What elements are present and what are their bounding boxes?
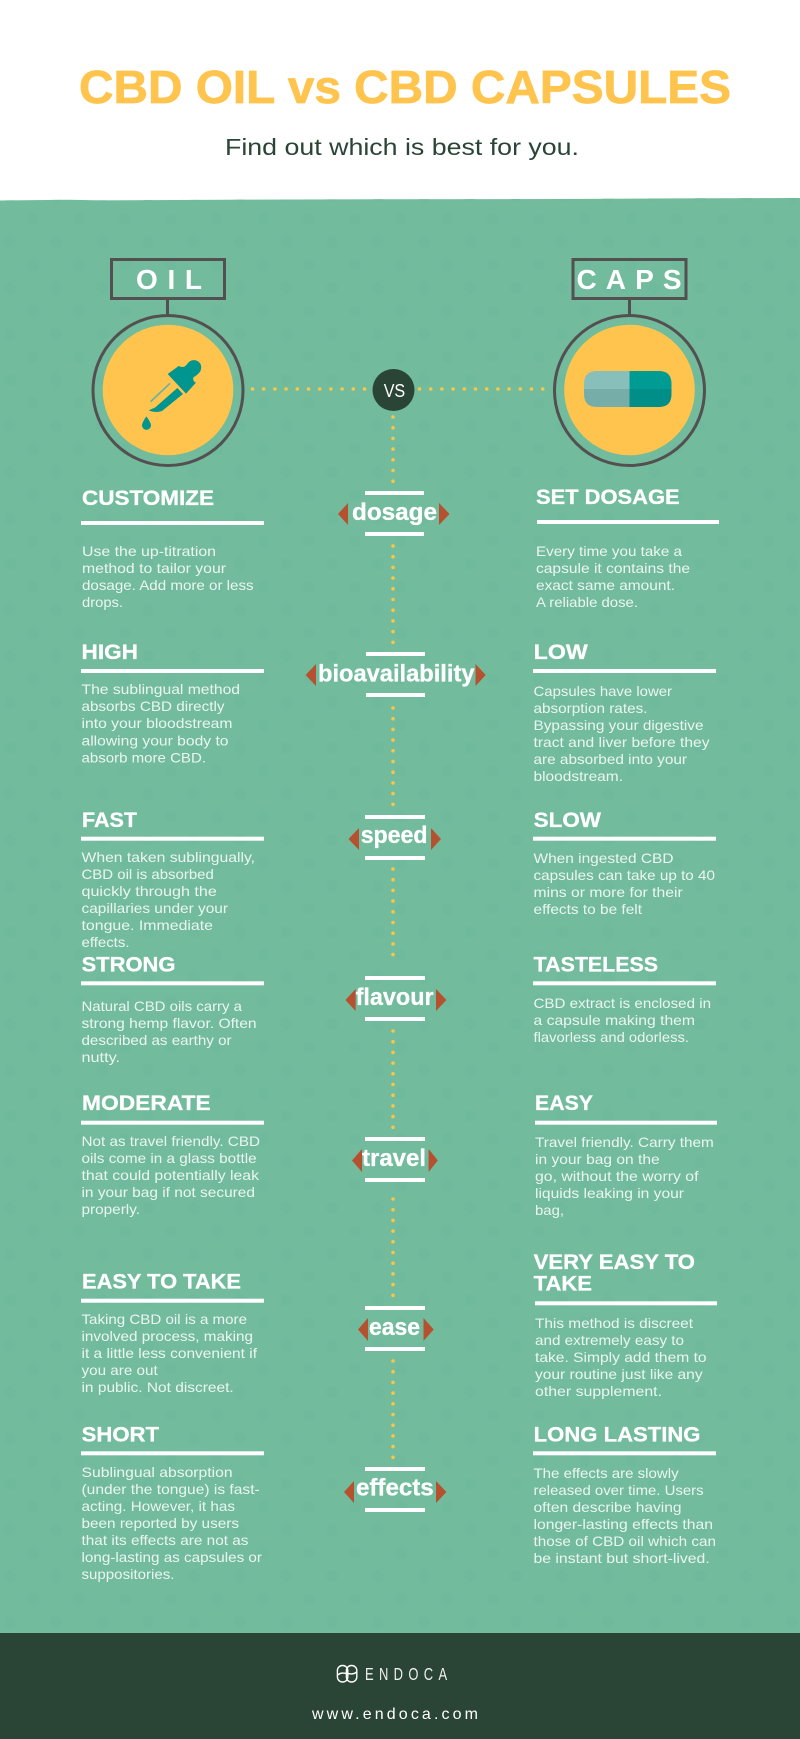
caps badge [573, 260, 686, 315]
oil badge: OIL [136, 264, 202, 295]
panel: caps effects: LONG LASTING [534, 1424, 700, 1447]
footer [0, 1633, 800, 1739]
panel: oil flavour [81, 954, 264, 1065]
text: caps flavour body [534, 995, 711, 1045]
label: flavour [345, 976, 446, 1021]
vs badge: VS [384, 381, 405, 401]
text: caps ease body: take. Simply add them to [535, 1349, 707, 1365]
text: caps ease body: your routine just like any [535, 1366, 703, 1382]
caps badge: CAPS [576, 264, 682, 295]
panel: oil bioavailability [81, 641, 264, 766]
panel: caps ease: TAKE [534, 1273, 592, 1296]
text: oil effects body: acting. However, it has [82, 1498, 235, 1514]
text: caps effects body: be instant but short-lived. [534, 1550, 710, 1566]
text: oil dosage body: dosage. Add more or less [82, 577, 254, 593]
label: effects [344, 1467, 446, 1512]
label: flavour: flavour [356, 984, 434, 1011]
connector: horizontal dots left [252, 387, 372, 391]
text: caps dosage body: exact same amount. [536, 577, 675, 593]
text: oil speed body: quickly through the [82, 883, 217, 899]
panel: caps speed: SLOW [534, 809, 601, 832]
connector: horizontal dots right [420, 387, 550, 391]
panel: caps ease: VERY EASY TO [534, 1251, 695, 1274]
text: caps bioavailability body: Capsules have lower [534, 683, 672, 699]
panel: caps effects [533, 1424, 716, 1566]
text: caps speed body: capsules can take up to 40 [534, 867, 715, 883]
text: caps effects body: those of CBD oil which can [534, 1533, 716, 1549]
text: caps bioavailability body: Bypassing your digestive [534, 717, 704, 733]
brand name: ENDOCA [365, 1665, 448, 1685]
header background [0, 0, 800, 202]
title: CBD OIL vs CBD CAPSULES [79, 61, 731, 113]
text: caps travel body: Travel friendly. Carry them [535, 1134, 714, 1150]
label: travel: travel [362, 1145, 426, 1172]
text: caps flavour body: CBD extract is enclosed in [534, 995, 711, 1011]
text: caps dosage body [536, 543, 690, 610]
text: oil bioavailability body: absorbs CBD directly [82, 698, 225, 714]
text: caps ease body: and extremely easy to [535, 1332, 684, 1348]
text: oil dosage body: method to tailor your [82, 560, 226, 576]
oil badge [112, 260, 224, 315]
icon: capsule in circle [554, 316, 704, 466]
text: oil ease body: involved process, making [82, 1328, 253, 1344]
label: speed [348, 815, 441, 860]
text: caps travel body: go, without the worry of [535, 1168, 699, 1184]
label: dosage: dosage [352, 499, 437, 526]
text: oil effects body: Sublingual absorption [82, 1464, 233, 1480]
text: caps ease body: This method is discreet [535, 1315, 693, 1331]
text: caps travel body: in your bag on the [535, 1151, 660, 1167]
icon: endoca logo [337, 1666, 357, 1682]
text: oil travel body [82, 1133, 260, 1217]
text: oil flavour body: described as earthy or [82, 1032, 232, 1048]
panel: caps dosage [536, 486, 719, 610]
text: oil speed body: When taken sublingually, [82, 849, 255, 865]
text: oil travel body: Not as travel friendly. CBD [82, 1133, 260, 1149]
text: caps ease body: other supplement. [535, 1383, 662, 1399]
text: oil travel body: oils come in a glass bottle [82, 1150, 257, 1166]
panel: caps travel [535, 1092, 717, 1218]
text: caps dosage body: A reliable dose. [536, 594, 638, 610]
text: caps flavour body: flavorless and odorless. [534, 1029, 689, 1045]
label: effects: effects [356, 1475, 434, 1502]
label: speed: speed [361, 822, 428, 849]
text: oil bioavailability body: The sublingual method [82, 681, 240, 697]
panel: oil dosage: CUSTOMIZE [82, 487, 214, 510]
panel: oil travel: MODERATE [82, 1092, 211, 1115]
panel: oil ease: EASY TO TAKE [82, 1271, 241, 1294]
panel: oil flavour: STRONG [82, 954, 176, 977]
text: caps bioavailability body: bloodstream. [534, 768, 623, 784]
text: oil effects body: long-lasting as capsules or [82, 1549, 262, 1565]
label: ease: ease [369, 1314, 420, 1341]
text: oil ease body: it a little less convenient if [82, 1345, 257, 1361]
text: oil speed body: tongue. Immediate [82, 917, 213, 933]
text: caps speed body [534, 850, 715, 917]
label: bioavailability [306, 652, 486, 697]
panel: oil bioavailability: HIGH [82, 641, 138, 664]
panel: oil speed [81, 809, 264, 950]
text: oil ease body: you are out [82, 1362, 158, 1378]
panel: caps bioavailability: LOW [534, 641, 588, 664]
text: caps dosage body: capsule it contains the [536, 560, 690, 576]
text: oil flavour body: strong hemp flavor. Often [82, 1015, 257, 1031]
text: oil bioavailability body: into your bloodstream [82, 715, 232, 731]
text: caps ease body [535, 1315, 707, 1399]
panel: oil effects: SHORT [82, 1424, 159, 1447]
panel: caps speed [533, 809, 716, 917]
label: bioavailability: bioavailability [318, 661, 475, 688]
text: caps speed body: mins or more for their [534, 884, 683, 900]
text: oil flavour body: Natural CBD oils carry a [82, 998, 242, 1014]
panel: caps flavour [533, 954, 716, 1045]
panel: caps flavour: TASTELESS [534, 954, 658, 977]
panel: oil ease [81, 1271, 264, 1395]
connector: vertical dots [391, 417, 395, 1458]
label: dosage [338, 491, 450, 536]
text: caps travel body [535, 1134, 714, 1218]
text: caps dosage body: Every time you take a [536, 543, 682, 559]
text: caps effects body: released over time. Users [534, 1482, 704, 1498]
text: oil speed body: effects. [82, 934, 130, 950]
panel: caps ease [534, 1251, 717, 1399]
panel: caps bioavailability [533, 641, 716, 784]
text: oil flavour body [82, 998, 257, 1065]
text: oil dosage body [82, 543, 254, 610]
vs badge [372, 369, 414, 411]
text: caps effects body: often describe having [534, 1499, 682, 1515]
text: caps travel body: liquids leaking in your [535, 1185, 684, 1201]
text: oil dosage body: drops. [82, 594, 123, 610]
text: caps speed body: When ingested CBD [534, 850, 674, 866]
text: oil effects body: suppositories. [82, 1566, 174, 1582]
text: oil bioavailability body [82, 681, 240, 766]
text: caps bioavailability body [534, 683, 710, 784]
text: oil effects body: that its effects are not as [82, 1532, 248, 1548]
panel: caps travel: EASY [535, 1092, 593, 1115]
text: oil flavour body: nutty. [82, 1049, 120, 1065]
text: caps speed body: effects to be felt [534, 901, 642, 917]
label: ease [358, 1306, 434, 1351]
text: caps travel body: bag, [535, 1202, 564, 1218]
text: oil bioavailability body: absorb more CBD. [82, 750, 206, 766]
panel: oil effects [81, 1424, 264, 1582]
text: oil effects body [82, 1464, 262, 1582]
text: caps bioavailability body: tract and liver before they [534, 734, 710, 750]
text: oil bioavailability body: allowing your body to [82, 732, 229, 748]
panel: oil dosage [81, 487, 264, 610]
text: oil travel body: that could potentially leak [82, 1167, 260, 1183]
text: oil ease body: in public. Not discreet. [82, 1379, 234, 1395]
text: oil travel body: properly. [82, 1201, 140, 1217]
icon: oil dropper in circle [93, 316, 243, 466]
text: oil dosage body: Use the up-titration [82, 543, 216, 559]
text: oil ease body: Taking CBD oil is a more [82, 1311, 247, 1327]
text: oil ease body [82, 1311, 257, 1395]
text: caps flavour body: a capsule making them [534, 1012, 695, 1028]
text: oil travel body: in your bag if not secured [82, 1184, 255, 1200]
text: oil speed body: CBD oil is absorbed [82, 866, 214, 882]
subtitle: Find out which is best for you. [225, 134, 579, 160]
panel: oil speed: FAST [82, 809, 137, 832]
text: caps effects body: The effects are slowly [534, 1465, 679, 1481]
panel: caps dosage: SET DOSAGE [536, 486, 680, 509]
text: oil speed body [82, 849, 255, 950]
text: caps effects body: longer-lasting effects than [534, 1516, 713, 1532]
text: oil effects body: (under the tongue) is fast- [82, 1481, 260, 1497]
panel: oil travel [81, 1092, 264, 1217]
text: oil speed body: capillaries under your [82, 900, 228, 916]
text: caps bioavailability body: absorption rates. [534, 700, 648, 716]
label: travel [352, 1137, 438, 1182]
text: caps bioavailability body: are absorbed into your [534, 751, 687, 767]
website: www.endoca.com [311, 1706, 478, 1723]
text: caps effects body [534, 1465, 716, 1566]
text: oil effects body: been reported by users [82, 1515, 239, 1531]
